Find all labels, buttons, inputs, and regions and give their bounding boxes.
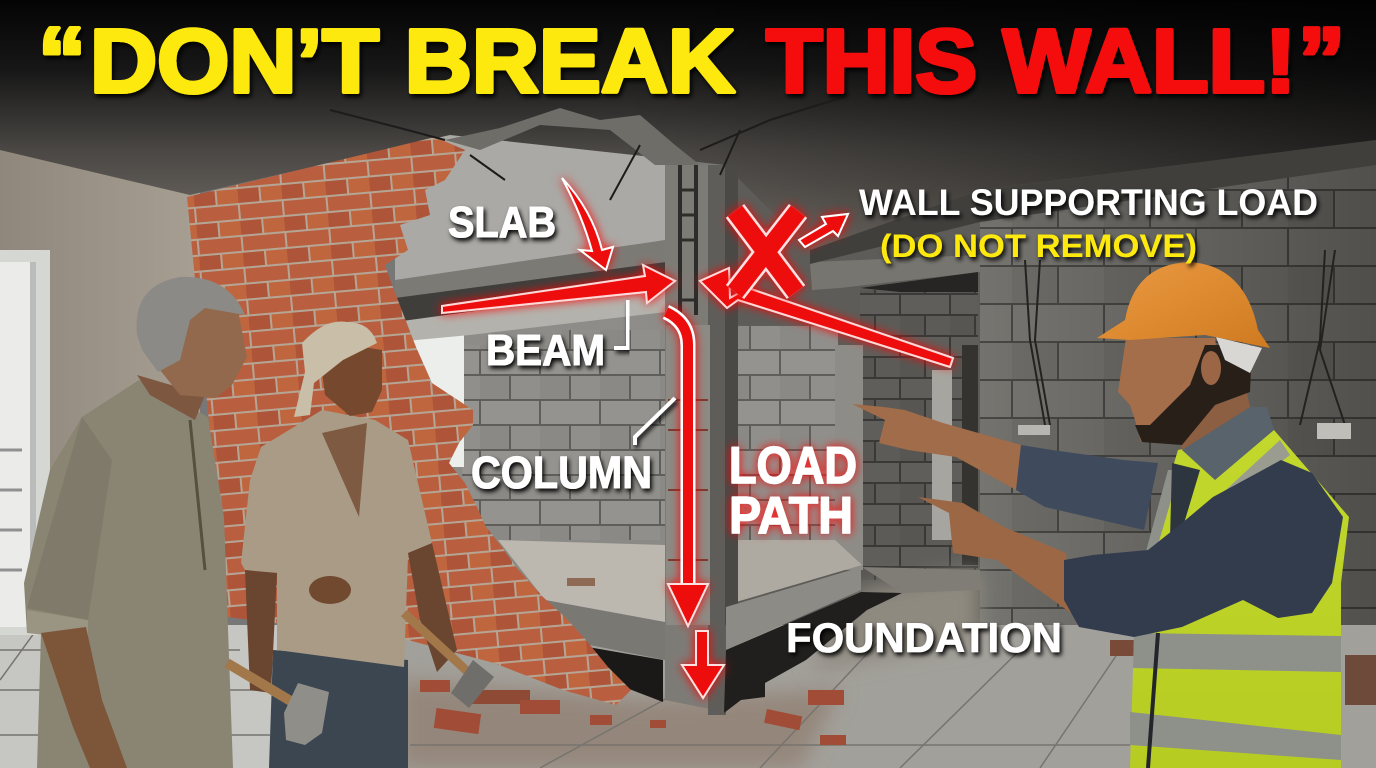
room floor slabs xyxy=(498,540,980,622)
lower arm hand xyxy=(918,497,1071,613)
label: foundation: FOUNDATION xyxy=(786,614,1062,661)
wires and socket boxes xyxy=(1018,250,1351,439)
neck and head xyxy=(137,375,205,420)
kurta xyxy=(24,380,233,768)
title: THIS WALL! xyxy=(766,12,1296,112)
slab and beam xyxy=(395,240,700,342)
person: worker with hammer xyxy=(227,321,494,768)
title: “ xyxy=(38,10,86,110)
hard hat xyxy=(1216,337,1262,373)
torso sleeve xyxy=(1064,460,1343,637)
shirt sleeve upper xyxy=(1016,445,1158,530)
upper arm hand xyxy=(852,404,1021,490)
shirt xyxy=(241,410,432,667)
reflective strips xyxy=(1133,633,1341,672)
jeans xyxy=(269,650,408,768)
column with rebar xyxy=(665,165,738,715)
label: slab: SLAB xyxy=(448,198,556,247)
label: column: COLUMN xyxy=(471,447,652,498)
arrow: callout pointer xyxy=(799,214,848,247)
label: load path: PATH xyxy=(729,487,853,545)
hammers xyxy=(227,663,294,703)
brick wall broken edge xyxy=(187,137,631,705)
rubble on floor xyxy=(420,578,1376,745)
head xyxy=(318,340,382,416)
ceiling crack and hole xyxy=(330,95,850,200)
label: do not remove: (DO NOT REMOVE) xyxy=(880,228,1197,264)
label: beam: BEAM xyxy=(486,326,605,375)
arrow: load path column xyxy=(666,312,708,626)
shirt chest and collar xyxy=(1170,463,1200,540)
vest xyxy=(1130,430,1349,768)
window inside room xyxy=(412,332,464,467)
person: older man xyxy=(24,277,247,768)
label: load path: LOAD xyxy=(729,437,857,495)
floor xyxy=(0,570,1376,768)
arrow: beam xyxy=(442,265,675,313)
arrow: into foundation xyxy=(682,631,724,698)
title: ” xyxy=(1298,10,1345,110)
window left xyxy=(0,250,50,635)
leader line: beam xyxy=(614,300,628,348)
title xyxy=(38,10,1345,112)
head xyxy=(1170,360,1250,450)
person: engineer pointing xyxy=(852,262,1349,768)
leader line: column xyxy=(635,398,675,445)
arrow: right beam xyxy=(700,268,953,367)
title: DON’T BREAK xyxy=(90,12,735,112)
forearm and hand xyxy=(41,627,127,768)
label: load path xyxy=(729,437,857,545)
arms xyxy=(245,570,277,693)
arrow: slab xyxy=(562,178,613,270)
arrow: red cross xyxy=(735,211,798,292)
foundation pit xyxy=(545,567,902,713)
label: wall supporting load: WALL SUPPORTING LOAD xyxy=(859,182,1318,223)
